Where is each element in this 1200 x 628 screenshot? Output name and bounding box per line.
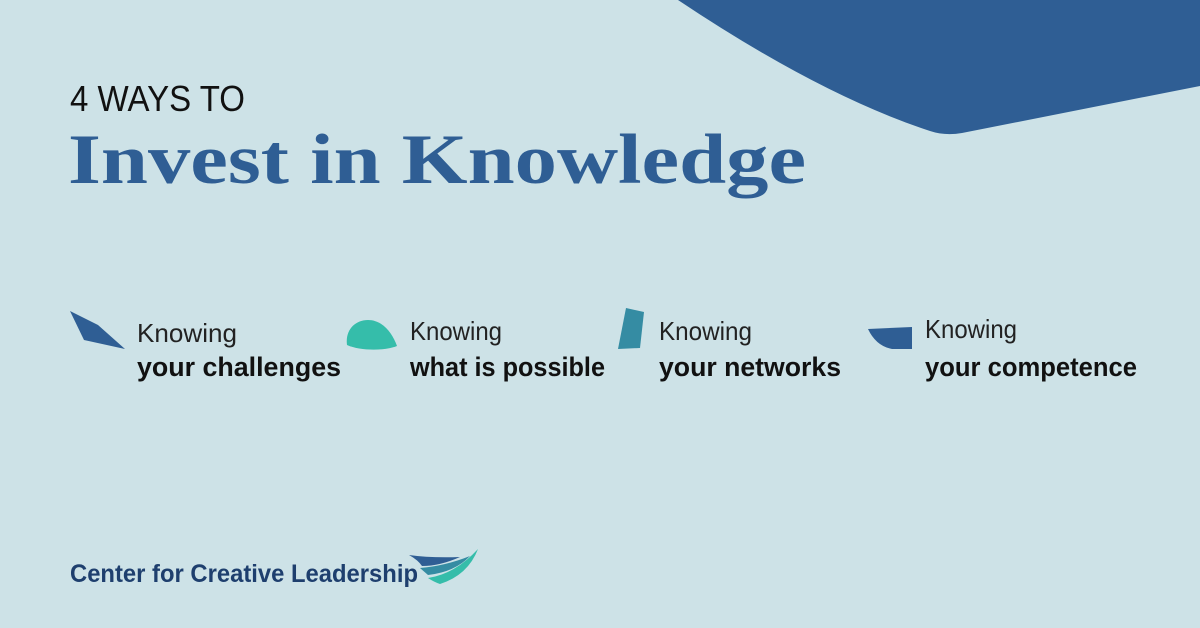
text: knowing your challenges: your challenges	[137, 352, 341, 382]
decorative blue shape top right	[678, 0, 1200, 134]
icon: logo swoosh	[409, 549, 478, 584]
icon: blue bowl shape	[868, 327, 912, 349]
logo: Center for Creative Leadership	[70, 549, 478, 588]
text: knowing your challenges	[137, 318, 341, 382]
text: knowing your networks: your networks	[659, 352, 841, 382]
item 3: your networks	[618, 308, 841, 382]
logo: Center for Creative Leadership: Center for Creative Leadership	[70, 560, 418, 588]
icon: blue diamond shard	[70, 311, 125, 349]
icon: teal dome	[347, 320, 397, 350]
text: knowing what is possible	[409, 316, 605, 382]
text: knowing what is possible: what is possible	[409, 352, 605, 382]
text: knowing what is possible: Knowing	[410, 316, 502, 346]
text: knowing your competence: Knowing	[925, 314, 1017, 344]
item 2: what is possible	[347, 316, 605, 382]
item 1: your challenges	[70, 311, 341, 382]
subtitle: 4 WAYS TO: 4 WAYS TO	[70, 78, 245, 119]
text: knowing your competence	[925, 314, 1137, 382]
title: Invest in Knowledge	[68, 121, 806, 199]
text: knowing your networks	[659, 316, 841, 382]
icon: teal-blue parallelogram	[618, 308, 644, 349]
text: knowing your challenges: Knowing	[137, 318, 237, 348]
text: knowing your networks: Knowing	[659, 316, 752, 346]
text: knowing your competence: your competence	[925, 352, 1137, 382]
item 4: your competence	[868, 314, 1137, 382]
